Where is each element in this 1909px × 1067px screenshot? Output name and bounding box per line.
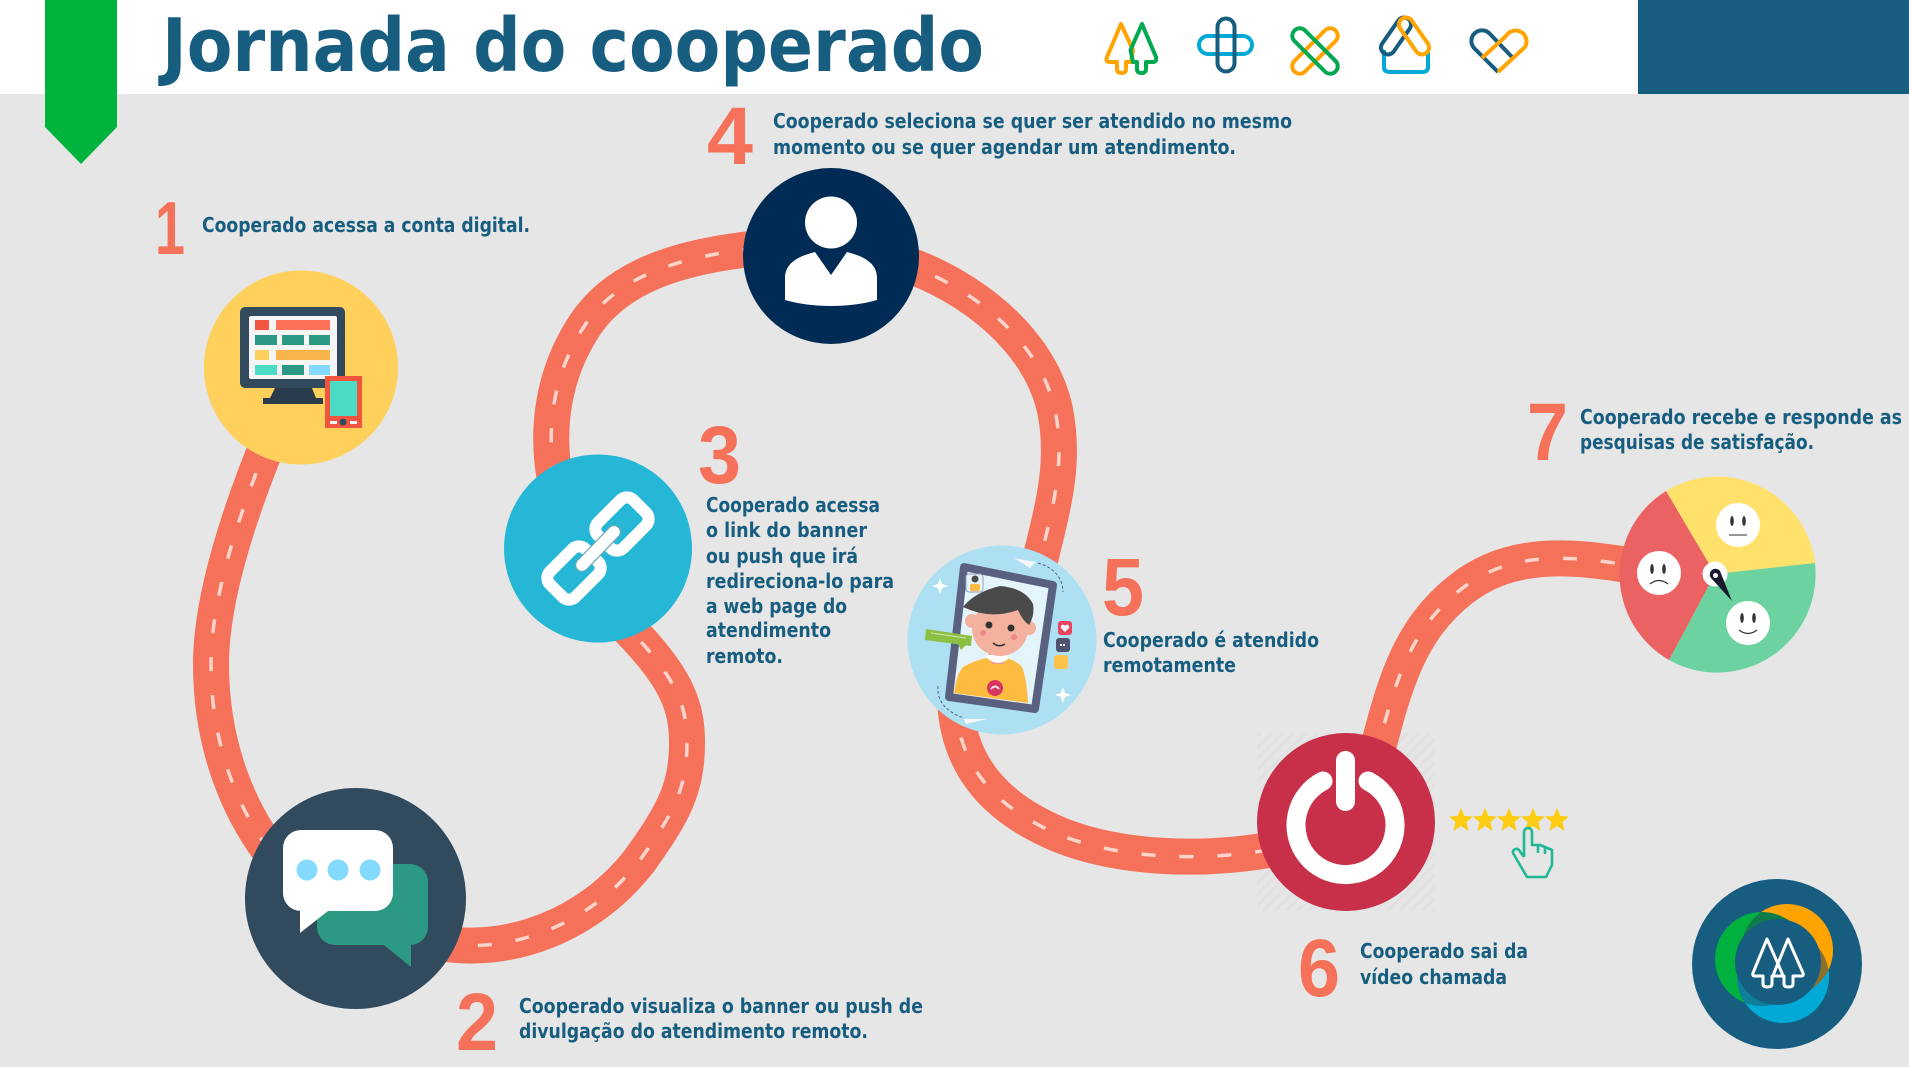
text step 3: a web page do [706,594,847,618]
panel: step 2 [245,788,923,1067]
number 4: 4 [707,91,753,182]
road [211,248,1640,946]
rating stars [1449,808,1569,831]
text step 5: remotamente [1103,653,1236,677]
icon: chat bubbles [245,788,466,1009]
number 6: 6 [1298,923,1340,1014]
face: sad [1637,551,1681,595]
wheel pointer [1702,562,1732,601]
number 2: 2 [456,977,498,1067]
panel: step 3 [504,410,894,668]
icon: person [743,168,919,344]
title: Jornada do cooperado [158,3,984,89]
panel: step 6 [1257,733,1569,1014]
text step 6: Cooperado sai da [1360,939,1528,963]
text step 3: ou push que irá [706,544,858,568]
text step 3: remoto. [706,644,783,668]
icon: power button [1257,733,1435,911]
icon: chain link [504,454,692,642]
text step 3: o link do banner [706,518,867,542]
icon: crossed bands [1289,25,1341,77]
text step 4: Cooperado seleciona se quer ser atendido no mesmo [773,109,1292,133]
text step 5: Cooperado é atendido [1103,628,1319,652]
number 1: 1 [155,186,185,270]
icon: house [1378,15,1432,72]
chart: satisfaction wheel [1620,477,1816,673]
panel: step 1 [155,186,530,464]
text step 1: Cooperado acessa a conta digital. [202,213,530,237]
text step 2: divulgação do atendimento remoto. [519,1019,868,1043]
green ribbon bookmark [45,0,117,164]
number 3: 3 [698,410,741,501]
number 5: 5 [1102,542,1144,633]
icon: heart [1471,30,1526,72]
icon: cross [1199,18,1252,72]
text step 4: momento ou se quer agendar um atendimento. [773,135,1236,159]
text step 3: atendimento [706,618,831,642]
icon: pointing hand [1513,828,1552,877]
text step 3: redireciona-lo para [706,569,894,593]
number 7: 7 [1527,387,1568,478]
header bar [0,0,1909,94]
panel: step 7 [1527,387,1902,673]
text step 2: Cooperado visualiza o banner ou push de [519,994,923,1018]
icon: trees [1106,24,1156,73]
face: happy [1726,601,1770,645]
face: neutral [1716,503,1760,547]
text step 7: pesquisas de satisfação. [1580,430,1814,454]
icon: computer and phone [204,270,398,464]
text step 3: Cooperado acessa [706,493,880,517]
header icon row [1106,15,1526,77]
logo [1692,879,1862,1049]
panel: step 4 [707,91,1292,344]
panel: step 5 [908,542,1319,734]
text step 6: vídeo chamada [1360,965,1507,989]
icon: video call on tablet [908,546,1096,734]
